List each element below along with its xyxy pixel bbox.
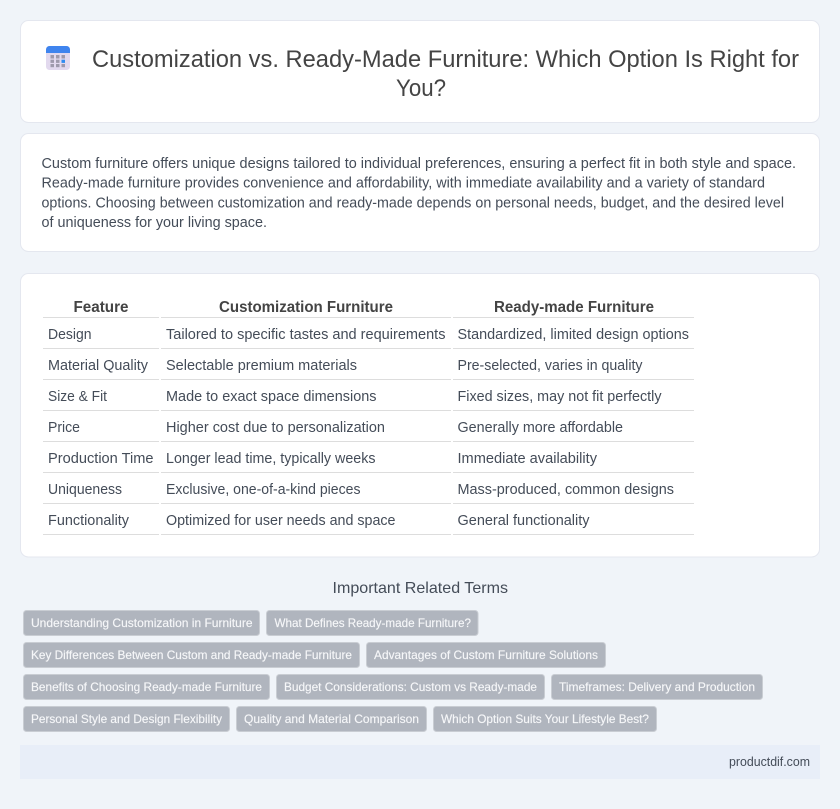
panel: title header xyxy=(20,20,820,122)
row: design xyxy=(48,327,689,343)
row: uniqueness xyxy=(48,482,674,498)
title: You? xyxy=(396,75,446,102)
row: material quality: Pre-selected, varies in quality xyxy=(458,358,643,374)
row: production time: Longer lead time, typically weeks xyxy=(166,451,376,467)
table header row: Ready-made Furniture xyxy=(494,299,654,316)
summary text: options. Choosing between customization and ready-made depends on personal needs, budget, and the desired level xyxy=(42,196,784,212)
row: size and fit xyxy=(48,389,662,405)
row: production time: Immediate availability xyxy=(458,451,598,467)
heading: important related terms: Important Related Terms xyxy=(332,580,508,597)
tag: understanding customization: Understanding Customization in Furniture xyxy=(31,616,253,630)
summary text: Custom furniture offers unique designs tailored to individual preferences, ensuring a perfect fit in both style and space. xyxy=(42,156,796,172)
tag: budget xyxy=(276,674,544,700)
row: price: Generally more affordable xyxy=(458,420,623,436)
related term tags xyxy=(24,610,762,732)
footer bar xyxy=(20,745,820,779)
table header row: Customization Furniture xyxy=(219,299,393,316)
row: material quality: Selectable premium materials xyxy=(166,358,357,374)
tag: lifestyle: Which Option Suits Your Lifestyle Best? xyxy=(441,712,649,726)
icon: calendar grid xyxy=(46,46,70,70)
tag: advantages: Advantages of Custom Furniture Solutions xyxy=(374,648,598,662)
tag: advantages xyxy=(366,642,606,668)
tag: what defines ready-made xyxy=(266,610,478,636)
tag: benefits: Benefits of Choosing Ready-made Furniture xyxy=(31,680,262,694)
row: price xyxy=(48,420,623,436)
tag: benefits xyxy=(24,674,270,700)
summary text: Ready-made furniture provides convenience and affordability, with immediate availability and a variety of standard xyxy=(42,176,765,192)
panel: comparison table xyxy=(20,274,820,557)
title: Customization vs. Ready-Made Furniture: Which Option Is Right for xyxy=(92,46,799,73)
row: uniqueness: Exclusive, one-of-a-kind pieces xyxy=(166,482,360,498)
tag: budget: Budget Considerations: Custom vs Ready-made xyxy=(284,680,537,694)
footer site name: productdif.com xyxy=(729,755,810,769)
row: uniqueness: Mass-produced, common designs xyxy=(458,482,674,498)
tag: lifestyle xyxy=(434,706,656,732)
row: design: Standardized, limited design options xyxy=(458,327,689,343)
tag: timeframes: Timeframes: Delivery and Production xyxy=(559,680,755,694)
row: price: Higher cost due to personalization xyxy=(166,420,385,436)
row: production time: Production Time xyxy=(48,451,154,467)
tag: personal style xyxy=(24,706,230,732)
row: functionality xyxy=(48,513,590,529)
row: material quality: Material Quality xyxy=(48,358,149,374)
table header row: Feature xyxy=(74,299,129,316)
row: material quality xyxy=(48,358,643,374)
tag: what defines ready-made: What Defines Ready-made Furniture? xyxy=(274,616,471,630)
tag: key differences xyxy=(24,642,360,668)
row: design: Tailored to specific tastes and requirements xyxy=(166,327,446,343)
row: design: Design xyxy=(48,327,92,343)
row: functionality: General functionality xyxy=(458,513,590,529)
tag: understanding customization xyxy=(24,610,260,636)
tag: personal style: Personal Style and Design Flexibility xyxy=(31,712,222,726)
row: size and fit: Fixed sizes, may not fit perfectly xyxy=(458,389,662,405)
table header row xyxy=(74,299,654,316)
row: price: Price xyxy=(48,420,80,436)
tag: quality and material: Quality and Material Comparison xyxy=(244,712,419,726)
row: uniqueness: Uniqueness xyxy=(48,482,122,498)
row: size and fit: Size & Fit xyxy=(48,389,107,405)
row: functionality: Optimized for user needs and space xyxy=(166,513,396,529)
panel: summary paragraph xyxy=(20,134,820,252)
row: size and fit: Made to exact space dimensions xyxy=(166,389,376,405)
row: functionality: Functionality xyxy=(48,513,130,529)
tag: quality and material xyxy=(236,706,426,732)
tag: key differences: Key Differences Between Custom and Ready-made Furniture xyxy=(31,648,352,662)
tag: timeframes xyxy=(552,674,762,700)
summary text: of uniqueness for your living space. xyxy=(42,215,267,231)
row: production time xyxy=(48,451,598,467)
